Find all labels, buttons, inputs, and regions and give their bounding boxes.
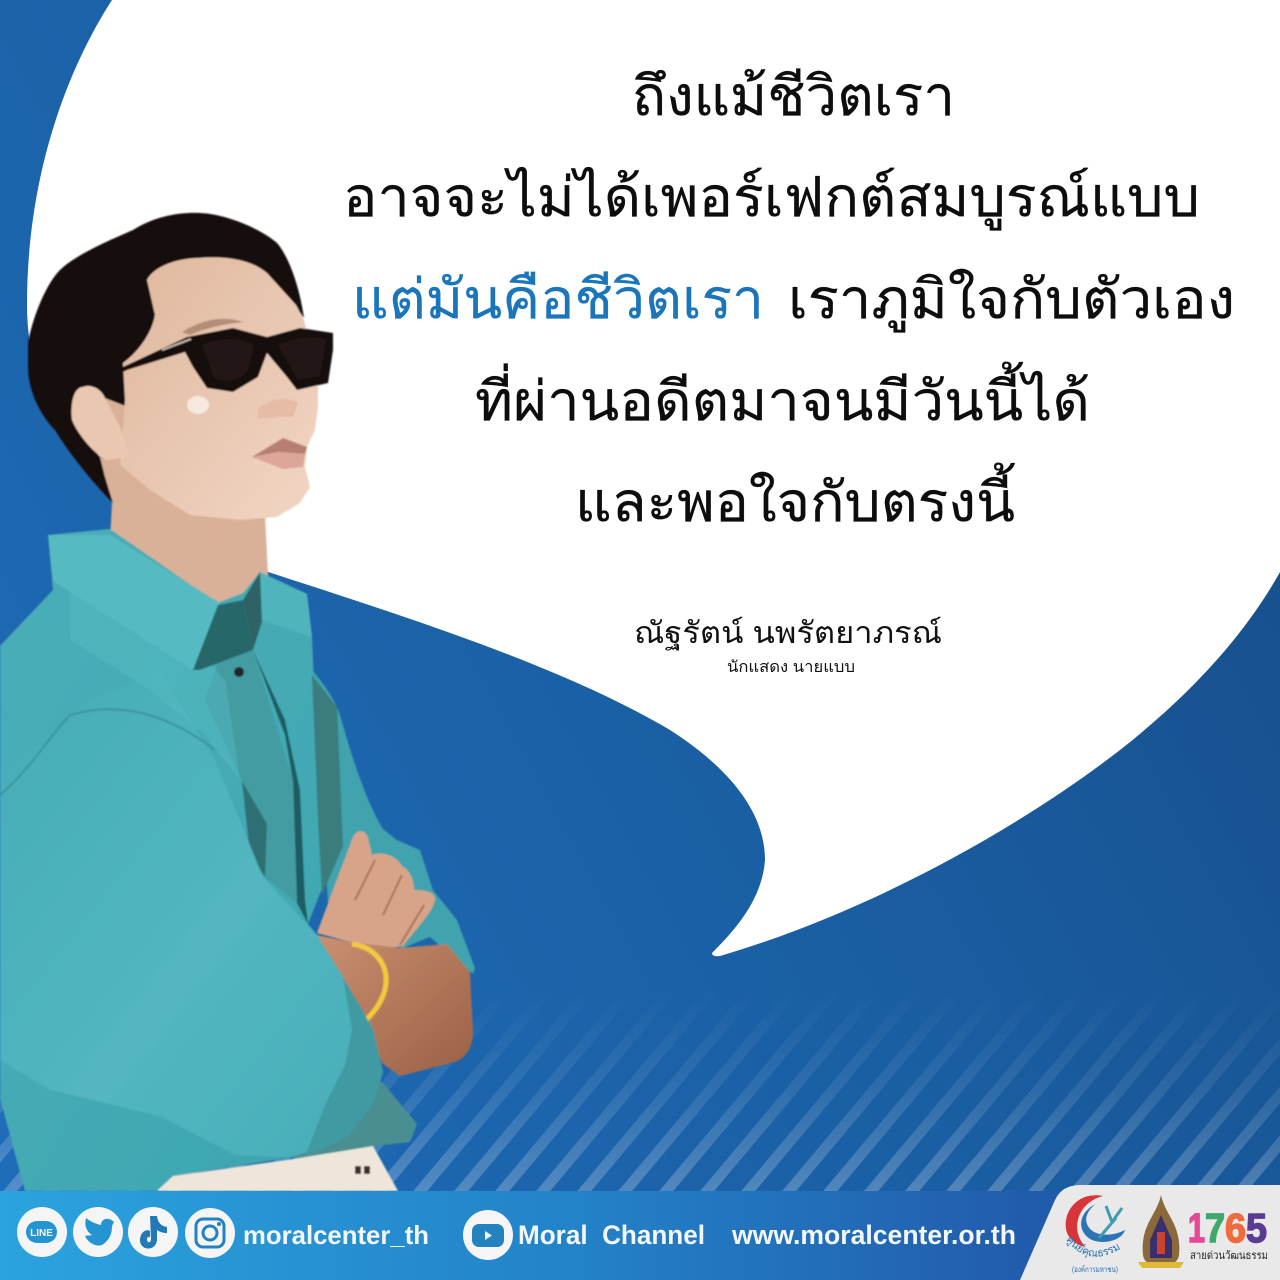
logo: 1765 hotline: 7 [1205,1205,1225,1251]
eyebrow [182,319,243,335]
icon: instagram [185,1208,235,1258]
website url: www.moralcenter.or.th [731,1220,1016,1250]
logo: moral center [1066,1195,1125,1274]
shirt deep fold [242,781,267,877]
icon: line: LINE [30,1228,53,1239]
nose [258,399,298,418]
shirt dark inner panel [312,675,343,895]
neck [90,380,268,670]
youtube channel name: Moral Channel [518,1220,705,1250]
sleeve cuff [305,977,383,1157]
front sleeve [0,672,383,1157]
face [120,257,318,520]
lower lip [252,452,305,469]
collar [48,535,220,670]
person illustration [0,213,475,1191]
logo: 1765 hotline [1188,1205,1268,1262]
forearm [317,935,473,1076]
background diagonal stripes [0,1028,1280,1191]
social handle: moralcenter_th [243,1220,429,1250]
right collar shadow [243,572,262,650]
shirt button [234,667,244,677]
finger lines [355,860,424,945]
shirt body [0,529,383,1191]
speaker role: นักแสดง นายแบบ [727,659,855,676]
right collar [260,572,312,637]
icon: youtube [463,1210,513,1260]
trousers [143,1146,398,1191]
icon: tiktok [128,1207,178,1257]
wristband [352,944,386,1020]
upper lip [252,438,307,457]
quote line 5: และพอใจกับตรงนี้ [575,463,1015,533]
logo: 1765 hotline: 5 [1246,1205,1267,1251]
quote line 1: ถึงแม้ชีวิตเรา [632,65,955,127]
logo panel [1020,1185,1280,1280]
collar shadow [193,600,253,670]
footer bar [0,1191,1280,1280]
quote line 3 continued: เราภูมิใจกับตัวเอง [788,268,1235,333]
ear [72,386,130,460]
hair [28,213,304,503]
shirt lower flap [293,1060,417,1159]
quote line 4: ที่ผ่านอดีตมาจนมีวันนี้ได้ [475,362,1090,432]
logo: 1765 hotline: 1 [1188,1205,1205,1251]
shirt inner shade [205,650,297,903]
logo: ministry of culture emblem [1138,1195,1184,1268]
shoulder highlight [70,590,240,780]
shoulder seam [0,709,215,795]
trouser buttons [355,1166,371,1174]
icon: line [17,1207,67,1257]
icon: twitter [73,1207,123,1257]
cheek highlight [187,396,209,414]
logo: 1765 hotline: 6 [1225,1205,1246,1251]
quote line 3 highlighted: แต่มันคือชีวิตเรา [352,268,764,330]
social icons [17,1207,235,1258]
logo: moral center: ศูนย์คุณธรรม [1066,1237,1120,1258]
quote line 2: อาจจะไม่ได้เพอร์เฟกต์สมบูรณ์แบบ [343,166,1200,231]
sunglasses [95,328,333,392]
hand [317,831,435,948]
logo: moral center: (องค์การมหาชน) [1072,1264,1118,1274]
speaker name: ณัฐรัตน์ นพรัตยาภรณ์ [634,616,942,651]
logo: 1765 hotline: สายด่วนวัฒนธรรม [1190,1250,1268,1262]
quote text [343,65,1235,533]
back sleeve [312,670,475,974]
speech bubble [27,0,1280,956]
shirt placket shadow [253,650,308,924]
